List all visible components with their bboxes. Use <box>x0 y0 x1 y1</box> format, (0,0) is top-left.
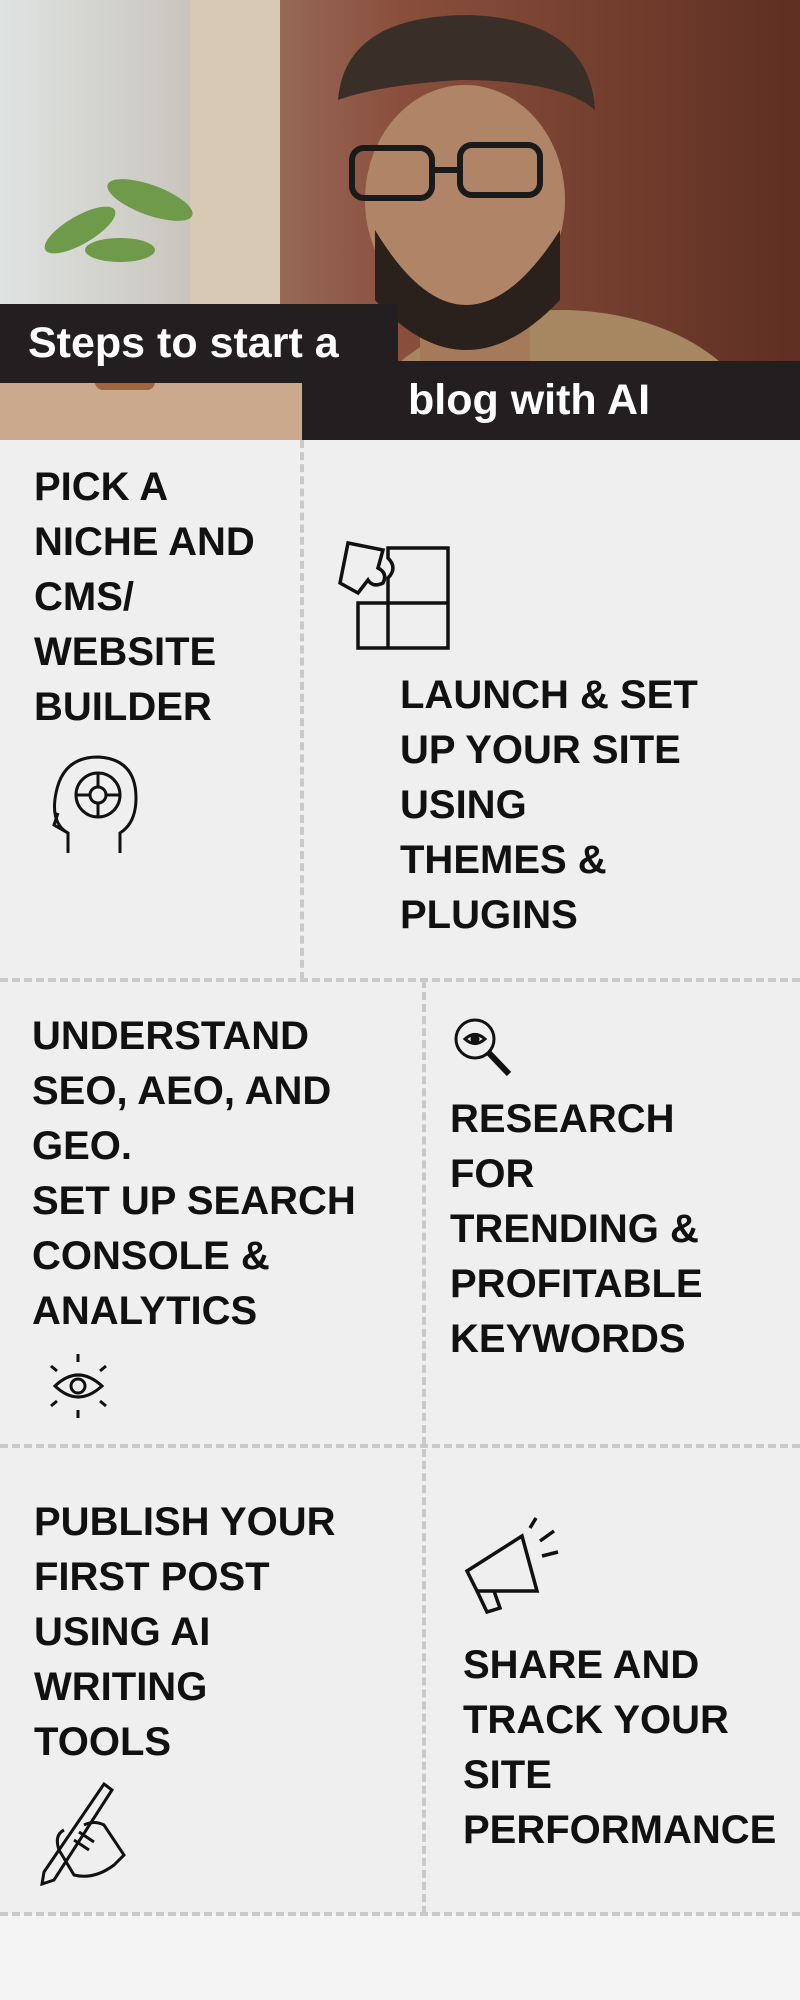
step 4 text: FOR <box>450 1152 534 1196</box>
icon: brain head <box>52 756 138 853</box>
step 2 text: PLUGINS <box>400 893 578 937</box>
step 2 text: UP YOUR SITE <box>400 728 681 772</box>
step 5 text: PUBLISH YOUR <box>34 1500 336 1544</box>
step 3 text: SET UP SEARCH <box>32 1179 356 1223</box>
icon: puzzle <box>338 541 450 650</box>
step 5 text: WRITING <box>34 1665 207 1709</box>
step 6 text: SHARE AND <box>463 1643 699 1687</box>
step 6 text: TRACK YOUR <box>463 1698 729 1742</box>
step 4 text: KEYWORDS <box>450 1317 686 1361</box>
icon: megaphone <box>464 1517 558 1614</box>
step 1 text: CMS/ <box>34 575 134 619</box>
plant <box>38 171 197 262</box>
step 1 text <box>34 465 255 729</box>
step 6 text: PERFORMANCE <box>463 1808 776 1852</box>
title: blog with AI <box>408 376 650 424</box>
grid background <box>0 440 800 1914</box>
step 1 text: NICHE AND <box>34 520 255 564</box>
step 1 text: WEBSITE <box>34 630 216 674</box>
step 2 text: LAUNCH & SET <box>400 673 698 717</box>
header photo <box>0 0 800 440</box>
step 3 text: UNDERSTAND <box>32 1014 309 1058</box>
step 6 text: SITE <box>463 1753 552 1797</box>
icon: eye <box>50 1354 107 1418</box>
step 1 text: PICK A <box>34 465 168 509</box>
step 3 text: GEO. <box>32 1124 132 1168</box>
step 5 text <box>34 1500 336 1764</box>
step 2 text <box>400 673 698 937</box>
icon: hand with pen <box>40 1782 126 1886</box>
step 5 text: TOOLS <box>34 1720 171 1764</box>
step 4 text <box>450 1097 703 1361</box>
step 2 text: THEMES & <box>400 838 607 882</box>
title: Steps to start a <box>28 319 339 367</box>
step 4 text: PROFITABLE <box>450 1262 703 1306</box>
step 4 text: TRENDING & <box>450 1207 699 1251</box>
step 1 text: BUILDER <box>34 685 212 729</box>
step 5 text: USING AI <box>34 1610 210 1654</box>
icon: magnifier <box>454 1018 512 1076</box>
step 5 text: FIRST POST <box>34 1555 270 1599</box>
step 3 text: CONSOLE & <box>32 1234 270 1278</box>
step 2 text: USING <box>400 783 527 827</box>
step 6 text <box>463 1643 776 1852</box>
step 4 text: RESEARCH <box>450 1097 674 1141</box>
step 3 text <box>32 1014 356 1333</box>
step 3 text: SEO, AEO, AND <box>32 1069 331 1113</box>
title <box>0 304 800 440</box>
person <box>360 310 760 570</box>
step 3 text: ANALYTICS <box>32 1289 257 1333</box>
